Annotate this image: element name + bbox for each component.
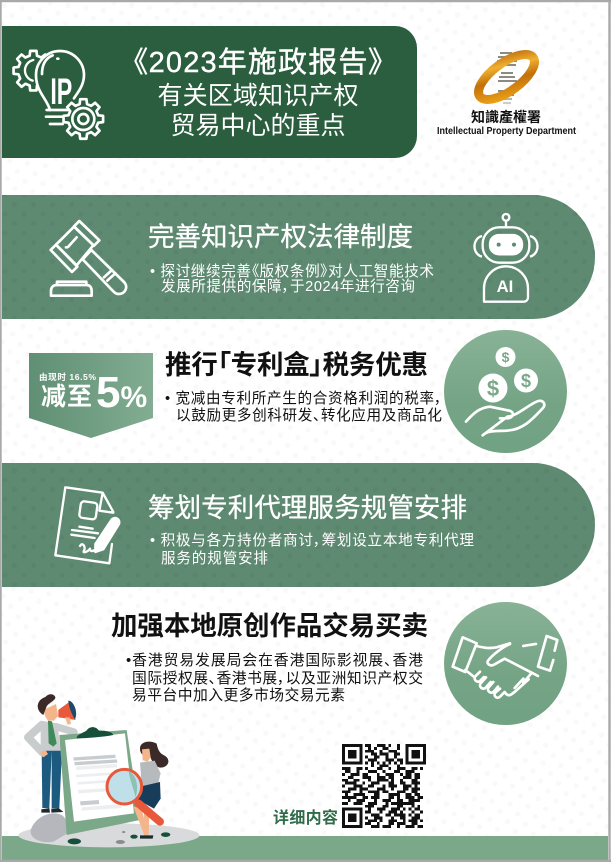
text block: 以鼓励更多创科研发、转化应用及商品化 bbox=[176, 406, 442, 424]
icon: IP light bulb with gears: IP bbox=[50, 70, 72, 112]
icon: IP light bulb with gears bbox=[14, 51, 103, 139]
magnifier bbox=[107, 769, 160, 822]
panel: patent box bbox=[29, 330, 567, 453]
text block: 易平台中加入更多市场交易元素 bbox=[132, 686, 345, 704]
text block: 国际授权展、香港书展，以及亚洲知识产权交 bbox=[132, 669, 423, 687]
panel: patent agent regulation bbox=[2, 463, 595, 587]
ribbon: reduced to 5%: 由现时 16.5% bbox=[39, 371, 96, 382]
header panel bbox=[2, 26, 417, 158]
text block bbox=[126, 652, 423, 704]
icon: gold ring bbox=[472, 46, 541, 108]
ribbon: reduced to 5%: 减至 bbox=[41, 383, 92, 411]
icon: coins and hand: $ bbox=[521, 371, 531, 391]
icon: AI robot bbox=[474, 214, 537, 302]
megaphone bbox=[58, 703, 76, 720]
label: details: 详细内容 bbox=[273, 808, 338, 827]
text block bbox=[150, 532, 474, 567]
title: 有关区域知识产权 bbox=[158, 82, 358, 110]
ground blobs bbox=[68, 831, 170, 844]
icon: handshake bbox=[444, 602, 567, 725]
text block: • 探讨继续完善《版权条例》对人工智能技术 bbox=[150, 262, 434, 280]
text block bbox=[165, 390, 442, 424]
text block: •香港贸易发展局会在香港国际影视展、香港 bbox=[126, 652, 423, 669]
heading: 加强本地原创作品交易买卖 bbox=[111, 611, 428, 641]
icon: signed document bbox=[55, 487, 119, 563]
title: 贸易中心的重点 bbox=[170, 112, 346, 140]
panel: trading of original works bbox=[111, 602, 567, 725]
heading: 推行「专利盒」税务优惠 bbox=[165, 350, 428, 380]
icon: coins and hand bbox=[444, 330, 567, 453]
QR code bbox=[342, 744, 426, 828]
rock bbox=[31, 813, 67, 842]
title: 《2023年施政报告》 bbox=[133, 46, 383, 79]
logo chinese name: 知識產權署 bbox=[471, 109, 541, 125]
text block: 服务的规管安排 bbox=[161, 550, 268, 567]
text block: • 积极与各方持份者商讨，筹划设立本地专利代理 bbox=[150, 532, 474, 549]
woman with magnifier bbox=[107, 742, 168, 839]
logo: Intellectual Property Department bbox=[437, 46, 577, 137]
ribbon: reduced to 5% bbox=[29, 353, 153, 438]
bottom bar bbox=[2, 836, 608, 860]
logo english name: Intellectual Property Department bbox=[437, 126, 577, 137]
icon: coins and hand: $ bbox=[502, 349, 510, 365]
ground ellipse bbox=[18, 823, 200, 847]
icon: coins and hand: $ bbox=[487, 376, 499, 401]
text block bbox=[150, 262, 434, 295]
icon: AI robot: AI bbox=[497, 277, 513, 296]
icon: gavel bbox=[51, 221, 126, 296]
heading: 筹划专利代理服务规管安排 bbox=[148, 493, 467, 523]
title bbox=[133, 46, 383, 140]
text block: • 宽减由专利所产生的合资格利润的税率， bbox=[165, 390, 442, 407]
man with megaphone bbox=[28, 694, 76, 813]
ribbon: reduced to 5%: 5% bbox=[96, 368, 147, 417]
text block: 发展所提供的保障，于2024年进行咨询 bbox=[161, 277, 415, 295]
illustration: people reviewing document bbox=[18, 694, 200, 847]
heading: 完善知识产权法律制度 bbox=[148, 222, 413, 252]
clipboard bbox=[59, 727, 140, 835]
panel: legal system bbox=[2, 195, 595, 319]
